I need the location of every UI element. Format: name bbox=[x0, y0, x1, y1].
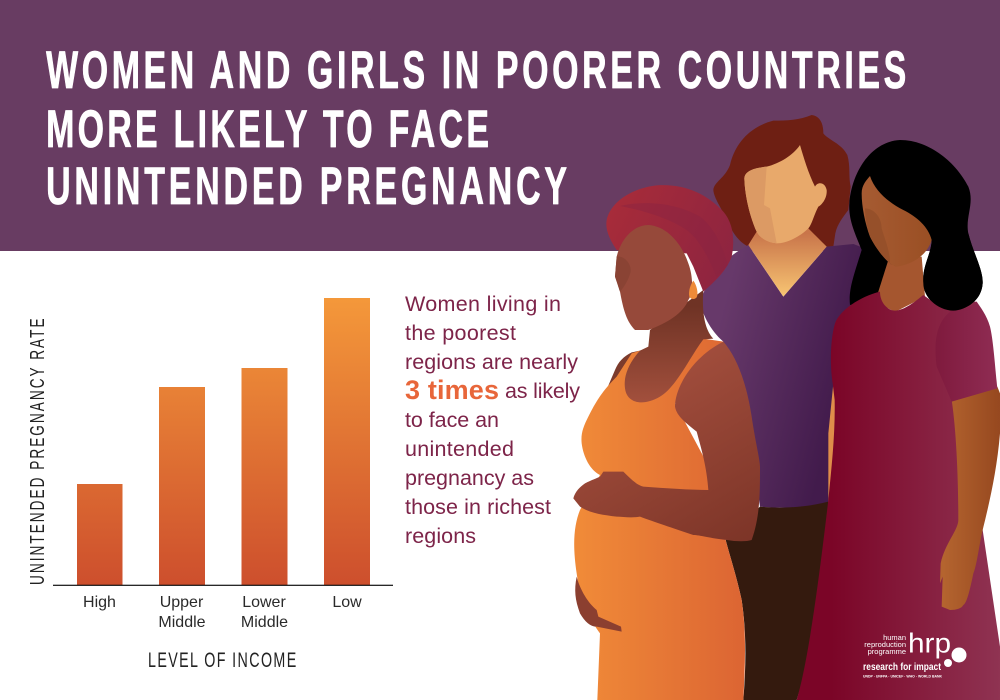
bar chart bbox=[26, 298, 393, 672]
x axis labels: Middle bbox=[241, 614, 288, 631]
x axis line bbox=[53, 585, 393, 586]
neck and chest bbox=[625, 290, 713, 402]
title: MORE LIKELY TO FACE bbox=[46, 101, 489, 159]
bar: lower middle bbox=[242, 368, 288, 585]
bar: high bbox=[77, 484, 122, 585]
face shadow bbox=[615, 256, 631, 292]
header band bbox=[0, 0, 1000, 251]
statistic text block: those in richest bbox=[405, 495, 551, 519]
dress bbox=[797, 292, 1000, 700]
statistic text block bbox=[405, 292, 580, 548]
statistic text block: regions bbox=[405, 524, 476, 548]
top bbox=[700, 244, 865, 508]
hair bbox=[713, 115, 851, 247]
neck bbox=[878, 257, 925, 312]
x axis labels: Upper bbox=[160, 594, 204, 611]
hair bbox=[849, 140, 983, 311]
statistic text block: unintended bbox=[405, 437, 514, 461]
title: WOMEN AND GIRLS IN POORER COUNTRIES bbox=[46, 42, 906, 100]
far arm bbox=[828, 377, 837, 503]
face bbox=[744, 145, 827, 243]
programme name: human bbox=[883, 633, 906, 642]
neck bbox=[748, 228, 827, 297]
illustration: three women bbox=[573, 115, 1000, 700]
trousers bbox=[726, 502, 828, 700]
bar: upper middle bbox=[159, 387, 205, 585]
turban fold bbox=[620, 203, 728, 277]
title bbox=[46, 42, 906, 216]
logo dots bbox=[944, 648, 966, 667]
sponsors: UNDP · UNFPA · UNICEF · WHO · WORLD BANK bbox=[863, 674, 942, 678]
arm and hand bbox=[573, 342, 760, 541]
statistic text block: regions are nearly bbox=[405, 350, 578, 374]
statistic text block: pregnancy as bbox=[405, 466, 534, 490]
y axis title: UNINTENDED PREGNANCY RATE bbox=[26, 318, 49, 585]
bar: low bbox=[324, 298, 370, 585]
hrp wordmark: hrp bbox=[908, 628, 951, 658]
arm and hand bbox=[940, 387, 1000, 610]
back shoulder bbox=[605, 351, 640, 393]
x axis title: LEVEL OF INCOME bbox=[148, 648, 296, 672]
earring bbox=[689, 281, 697, 299]
statistic text block: the poorest bbox=[405, 321, 516, 345]
x axis labels: High bbox=[83, 594, 116, 611]
programme name bbox=[864, 633, 906, 656]
turban bbox=[606, 185, 733, 292]
x axis labels bbox=[83, 594, 362, 631]
face shadow bbox=[744, 167, 777, 243]
face bbox=[615, 225, 692, 330]
statistic text block: 3 times bbox=[405, 375, 499, 405]
middle woman bbox=[700, 115, 865, 700]
face shadow bbox=[865, 208, 897, 267]
left pregnant woman bbox=[573, 185, 760, 700]
programme name: reproduction bbox=[864, 640, 906, 649]
dress bbox=[574, 339, 745, 700]
tagline: research for impact bbox=[863, 661, 941, 673]
x axis labels: Middle bbox=[158, 614, 206, 631]
statistic text block: to face an bbox=[405, 408, 499, 432]
statistic text block: as likely bbox=[505, 379, 580, 403]
face bbox=[862, 176, 932, 267]
x axis labels: Lower bbox=[242, 594, 286, 611]
x axis labels: Low bbox=[332, 594, 362, 611]
programme name: programme bbox=[868, 647, 906, 656]
sleeve bbox=[936, 302, 997, 402]
front hair lock bbox=[923, 233, 983, 311]
lower hand bbox=[575, 577, 622, 632]
logo: hrp bbox=[863, 628, 966, 678]
statistic text block: Women living in bbox=[405, 292, 561, 316]
title: UNINTENDED PREGNANCY bbox=[46, 158, 567, 216]
right woman bbox=[797, 140, 1000, 700]
